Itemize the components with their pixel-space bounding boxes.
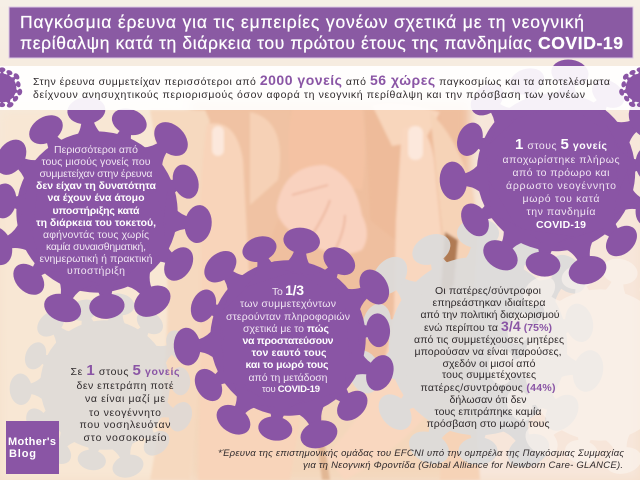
- text block: fathers and partners: Οι πατέρες/σύντροφοι: [435, 285, 542, 297]
- text block: fathers and partners: δήλωσαν ότι δεν: [450, 394, 526, 406]
- text block: bottom-left statistic: Σε 1 στους 5 γονείς: [70, 362, 180, 379]
- icon: small virus left: [0, 67, 23, 109]
- right virus text: αποχωρίστηκε πλήρως: [502, 154, 620, 166]
- right virus text: μωρό του κατά: [522, 193, 600, 205]
- right virus text: την πανδημία: [526, 206, 596, 218]
- panel: title bar: [9, 7, 633, 58]
- text block: fathers and partners: [414, 285, 564, 430]
- text block: fathers and partners: πρόσβαση στο μωρό τους: [426, 418, 550, 430]
- icon: small virus right: [618, 67, 640, 109]
- center virus text: των συμμετεχόντων: [240, 298, 336, 310]
- text block: bottom-left statistic: να είναι μαζί με: [85, 393, 165, 405]
- text block: fathers and partners: πατέρες/συντρόφους (44%): [420, 382, 556, 394]
- text block: bottom-left statistic: δεν επετράπη ποτέ: [76, 380, 174, 392]
- text block: fathers and partners: τους συμμετέχοντες: [442, 369, 536, 381]
- panel: intro band: [0, 66, 640, 110]
- right virus text: από το πρόωρο και: [512, 167, 610, 179]
- panel: left purple virus: [0, 85, 228, 344]
- panel: right purple virus: [420, 43, 640, 305]
- left virus text: καμία συναισθηματική,: [46, 241, 146, 253]
- right virus text: COVID-19: [536, 219, 586, 231]
- logo: Mother's Blog: Mother's: [8, 436, 56, 448]
- left virus text: τη διάρκεια του τοκετού,: [36, 217, 156, 229]
- text block: bottom-left statistic: [70, 362, 180, 444]
- footnote: *Έρευνα της επιστημονικής ομάδας του EFCNI υπό την ομπρέλα της Παγκόσμιας Συμμαχίας: [218, 448, 624, 459]
- center virus text: στερούνταν πληροφοριών: [226, 311, 350, 323]
- text block: fathers and partners: από τις συμμετέχουσες μητέρες: [414, 334, 564, 346]
- right virus text: [502, 136, 620, 231]
- center virus text: Το 1/3: [272, 282, 304, 298]
- center virus text: του COVID-19: [262, 384, 320, 395]
- text block: bottom-left statistic: που νοσηλευόταν: [80, 419, 170, 431]
- text block: fathers and partners: σχεδόν οι μισοί από: [442, 358, 536, 370]
- left virus text: υποστήριξη: [67, 265, 125, 277]
- logo: Mother's Blog: [6, 421, 59, 474]
- center virus text: να προστατεύσουν: [242, 335, 334, 347]
- left virus text: ενημερωτική ή πρακτική: [40, 253, 153, 265]
- left virus text: Περισσότεροι από: [54, 144, 138, 156]
- left virus text: αφήνοντάς τους χωρίς: [43, 229, 149, 241]
- right virus text: άρρωστο νεογέννητο: [506, 180, 616, 192]
- title line 1: Παγκόσμια έρευνα για τις εμπειρίες γονέων σχετικά με τη νεογνική: [20, 12, 584, 32]
- text block: bottom-left statistic: το νεογέννητο: [89, 407, 161, 419]
- text block: fathers and partners: επηρεάστηκαν ιδιαίτερα: [432, 297, 546, 309]
- left virus text: [36, 144, 157, 277]
- ghost virus behind bottom-left text: [0, 277, 215, 480]
- intro line 1: Στην έρευνα συμμετείχαν περισσότεροι από 2000 γονείς από 56 χώρες παγκοσμίως και τα αποτελέσματα: [33, 72, 610, 88]
- center virus text: [226, 282, 350, 395]
- center virus text: και το μωρό τους: [246, 359, 329, 371]
- center virus text: σχετικά με το πώς: [243, 323, 330, 335]
- ghost virus behind fathers text: [342, 218, 610, 479]
- text block: fathers and partners: από την πολιτική διαχωρισμού: [420, 309, 560, 321]
- left virus text: συμμετείχαν στην έρευνα: [40, 168, 152, 180]
- center virus text: από τη μετάδοση: [248, 372, 328, 384]
- right virus text: 1 στους 5 γονείς: [515, 136, 608, 153]
- left virus text: δεν είχαν τη δυνατότητα: [36, 180, 157, 192]
- intro line 2: δείχνουν ανησυχητικούς περιορισμούς όσον αφορά τη νεογνική περίθαλψη και την πρόσβαση των γονέων: [33, 89, 585, 101]
- text block: fathers and partners: ενώ περίπου τα 3/4 (75%): [424, 318, 552, 334]
- text block: fathers and partners: μπορούσαν να είναι παρούσες,: [414, 346, 562, 358]
- center virus text: τον εαυτό τους: [252, 347, 327, 359]
- ghost virus at far right: [464, 235, 640, 480]
- panel: center purple virus: [155, 211, 417, 469]
- text block: bottom-left statistic: στο νοσοκομείο: [84, 432, 167, 444]
- footnote: [218, 448, 624, 471]
- text block: fathers and partners: τους επιτράπηκε καμία: [434, 406, 542, 418]
- left virus text: υποστήριξης κατά: [52, 205, 140, 217]
- left virus text: τους μισούς γονείς που: [42, 156, 151, 168]
- footnote: για τη Νεογνική Φροντίδα (Global Alliance for Newborn Care- GLANCE).: [303, 460, 623, 471]
- left virus text: να έχουν ένα άτομο: [48, 192, 144, 204]
- logo: Mother's Blog: Blog: [9, 448, 36, 460]
- title line 2: περίθαλψη κατά τη διάρκεια του πρώτου έτους της πανδημίας COVID-19: [20, 33, 623, 53]
